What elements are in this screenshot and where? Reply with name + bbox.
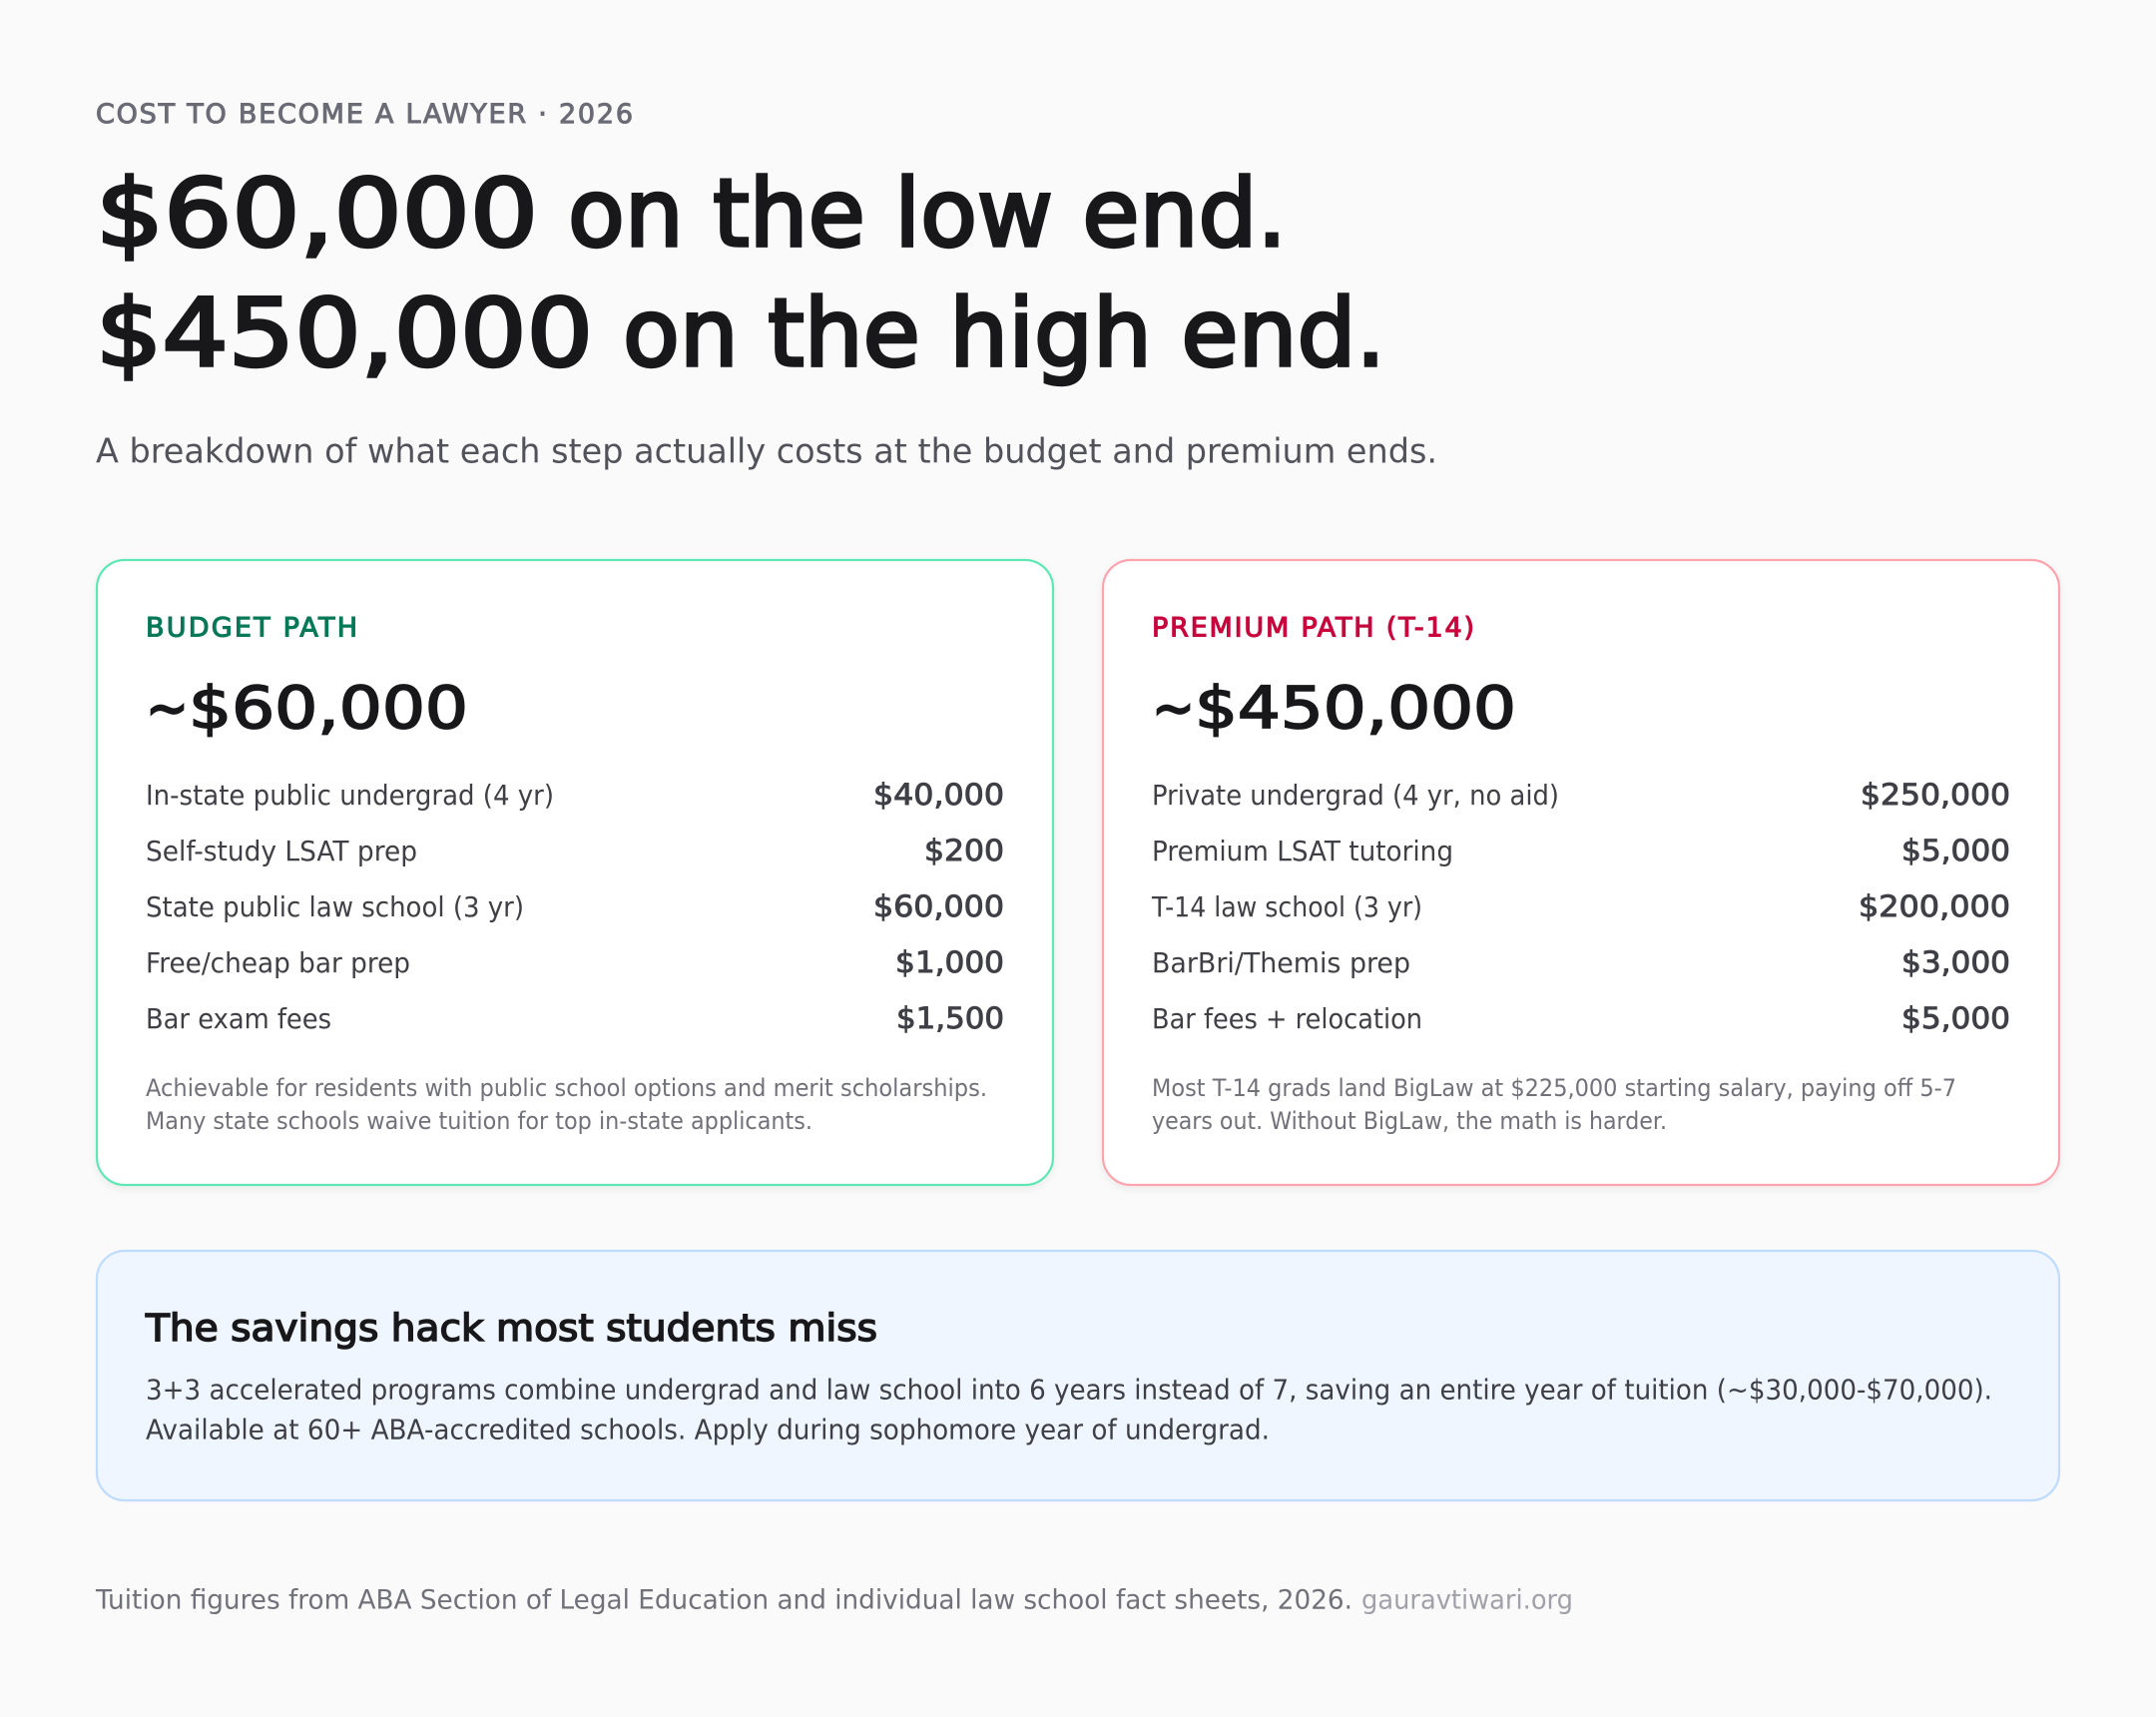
panel: premium path bbox=[1103, 560, 2059, 1185]
budget rows: Bar exam fees bbox=[146, 1002, 331, 1035]
budget note: Many state schools waive tuition for top in-state applicants. bbox=[146, 1107, 812, 1135]
premium total: ~ bbox=[1152, 674, 1195, 742]
title line 2: $450,000 bbox=[96, 280, 593, 388]
premium note bbox=[1152, 1074, 1956, 1135]
budget rows: $200 bbox=[924, 834, 1004, 867]
premium rows: Bar fees + relocation bbox=[1152, 1002, 1422, 1035]
budget rows: $60,000 bbox=[873, 889, 1004, 923]
title line 1: $60,000 bbox=[96, 160, 538, 269]
budget total: $60,000 bbox=[189, 674, 468, 742]
premium total: $450,000 bbox=[1195, 674, 1516, 742]
callout heading: The savings hack most students miss bbox=[145, 1307, 877, 1350]
source note: Tuition figures from ABA Section of Legal Education and individual law school fact sheets, 2026. bbox=[95, 1585, 1352, 1615]
premium rows: $5,000 bbox=[1901, 834, 2010, 867]
site credit: gauravtiwari.org bbox=[1361, 1585, 1573, 1615]
premium note: years out. Without BigLaw, the math is harder. bbox=[1152, 1107, 1667, 1135]
premium note: Most T-14 grads land BigLaw at $225,000 starting salary, paying off 5-7 bbox=[1152, 1074, 1956, 1102]
premium rows: BarBri/Themis prep bbox=[1152, 946, 1410, 979]
budget rows: $1,000 bbox=[895, 945, 1004, 979]
premium rows: T-14 law school (3 yr) bbox=[1151, 890, 1422, 923]
title line 2 bbox=[96, 280, 1385, 388]
callout body: Available at 60+ ABA-accredited schools. Apply during sophomore year of undergrad. bbox=[146, 1414, 1270, 1445]
premium rows: $3,000 bbox=[1901, 945, 2010, 979]
subtitle: A breakdown of what each step actually costs at the budget and premium ends. bbox=[96, 431, 1437, 471]
premium rows: Premium LSAT tutoring bbox=[1152, 835, 1453, 867]
budget note: Achievable for residents with public school options and merit scholarships. bbox=[146, 1074, 987, 1102]
premium rows bbox=[1151, 778, 2010, 1035]
budget rows: $1,500 bbox=[896, 1001, 1004, 1035]
premium rows: $5,000 bbox=[1901, 1001, 2010, 1035]
callout body bbox=[146, 1374, 1992, 1445]
budget rows: In-state public undergrad (4 yr) bbox=[146, 779, 554, 812]
title line 2: on the high end. bbox=[623, 280, 1385, 388]
callout: savings hack bbox=[97, 1251, 2059, 1500]
budget label: BUDGET PATH bbox=[146, 613, 357, 643]
premium rows: $200,000 bbox=[1859, 889, 2010, 923]
premium label: PREMIUM PATH (T-14) bbox=[1152, 613, 1474, 643]
panel: budget path bbox=[97, 560, 1053, 1185]
footer bbox=[95, 1585, 1573, 1615]
title line 1: on the low end. bbox=[568, 160, 1287, 269]
title line 1 bbox=[96, 160, 1287, 269]
budget rows: Self-study LSAT prep bbox=[146, 835, 417, 867]
premium rows: $250,000 bbox=[1861, 778, 2010, 812]
budget rows bbox=[146, 778, 1004, 1035]
budget rows: $40,000 bbox=[873, 778, 1004, 812]
budget rows: Free/cheap bar prep bbox=[146, 946, 410, 979]
eyebrow: COST TO BECOME A LAWYER · 2026 bbox=[96, 99, 633, 130]
header bbox=[96, 99, 1437, 471]
premium rows: Private undergrad (4 yr, no aid) bbox=[1152, 779, 1559, 812]
budget note bbox=[146, 1074, 987, 1135]
callout body: 3+3 accelerated programs combine undergrad and law school into 6 years instead of 7, saving an entire year of tuition (~$30,000-$70,000). bbox=[146, 1374, 1992, 1406]
budget rows: State public law school (3 yr) bbox=[146, 890, 524, 923]
budget total: ~ bbox=[146, 674, 189, 742]
